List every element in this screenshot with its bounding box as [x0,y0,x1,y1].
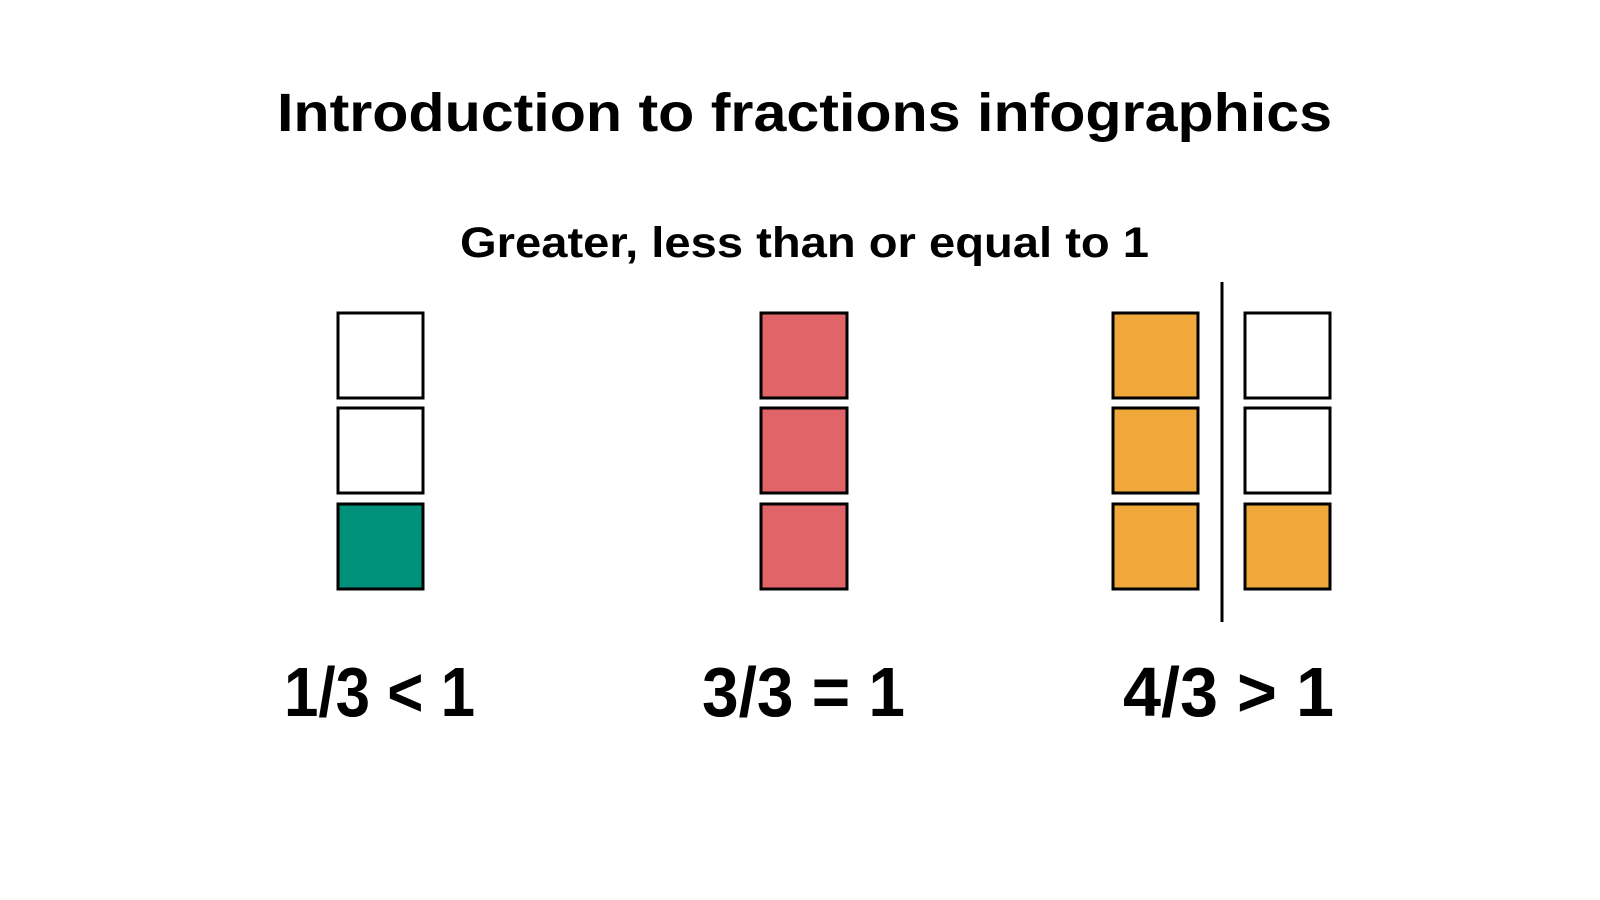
panel: four thirds [1113,282,1330,622]
label: 4/3 > 1: 4/3 > 1 [1123,653,1334,731]
panel: three thirds [761,313,847,589]
panel: one third [338,313,423,589]
subtitle: Greater, less than or equal to 1 [460,219,1149,267]
label: 3/3 = 1: 3/3 = 1 [702,653,905,731]
title: Introduction to fractions infographics [277,83,1332,143]
label: 1/3 < 1: 1/3 < 1 [284,653,475,731]
